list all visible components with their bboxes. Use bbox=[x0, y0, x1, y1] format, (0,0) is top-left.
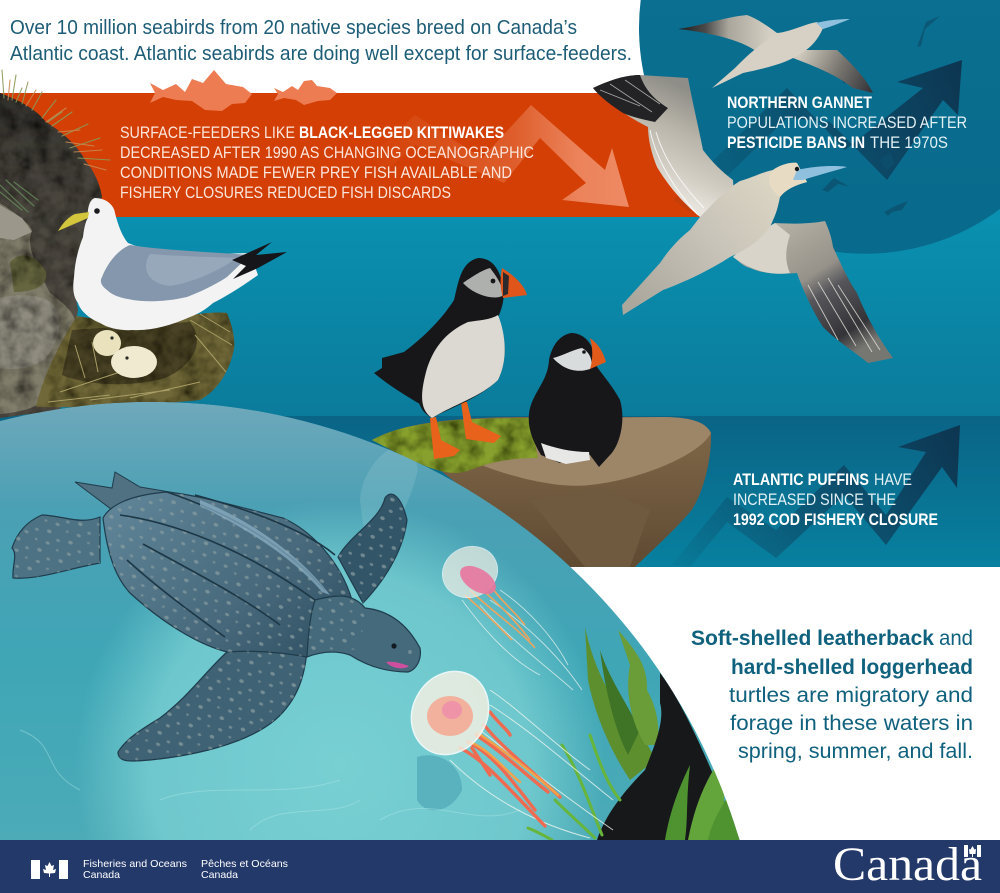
department name French bbox=[201, 858, 288, 881]
panel: sea background bbox=[0, 150, 1000, 418]
arrow: puffin increase bbox=[672, 425, 960, 567]
illustration: small northern gannet bbox=[678, 15, 873, 93]
text block: atlantic puffins: 1992 COD FISHERY CLOSURE bbox=[733, 510, 938, 529]
text block: northern gannet: THE 1970S bbox=[870, 133, 948, 152]
illustration: puffin standing bbox=[374, 258, 527, 459]
department name French: Pêches et Océans bbox=[201, 858, 288, 870]
panel: orange surface-feeder band bbox=[0, 70, 700, 217]
text block: surface-feeders bbox=[120, 123, 534, 202]
text block: northern gannet: PESTICIDE BANS IN bbox=[727, 133, 865, 152]
illustration: seaweed bbox=[528, 627, 745, 840]
heading: intro text: Atlantic coast. Atlantic seabirds are doing well except for surface-feeders. bbox=[10, 42, 632, 65]
text block: atlantic puffins bbox=[733, 470, 938, 529]
illustration: puffin from behind bbox=[529, 333, 622, 467]
grass tuft bbox=[2, 70, 110, 170]
arrow: kittiwake decrease bbox=[370, 105, 629, 207]
text block: atlantic puffins: ATLANTIC PUFFINS bbox=[733, 470, 869, 489]
mouth bbox=[386, 662, 409, 668]
text block: sea turtles: and bbox=[939, 627, 973, 650]
heading: intro text bbox=[10, 16, 632, 65]
footer bbox=[0, 838, 1000, 893]
tail points bbox=[75, 472, 170, 512]
lower wing bbox=[733, 221, 893, 363]
text block: surface-feeders: SURFACE-FEEDERS LIKE bbox=[120, 123, 295, 142]
rear flipper bbox=[12, 515, 100, 578]
dark rock face bbox=[0, 93, 102, 418]
department name English bbox=[83, 858, 187, 881]
icon: Canadian flag signature bbox=[31, 860, 68, 879]
lower grey boulder bbox=[0, 203, 75, 414]
illustration: upper jellyfish bbox=[434, 538, 582, 690]
text block: surface-feeders: FISHERY CLOSURES REDUCED FISH DISCARDS bbox=[120, 183, 451, 202]
illustration: large northern gannet bbox=[593, 75, 893, 363]
arrow: gannet increase bbox=[673, 60, 962, 212]
text block: sea turtles bbox=[691, 627, 973, 763]
text block: northern gannet: NORTHERN GANNET bbox=[727, 93, 873, 112]
legs and feet bbox=[430, 402, 501, 459]
illustration: black-legged kittiwake bbox=[58, 198, 287, 330]
department name English: Fisheries and Oceans bbox=[83, 858, 187, 870]
text block: surface-feeders: CONDITIONS MADE FEWER PREY FISH AVAILABLE AND bbox=[120, 163, 512, 182]
icon: chick 2 bbox=[111, 346, 157, 378]
icon: distant gannet silhouettes bbox=[822, 16, 940, 216]
department name French: Canada bbox=[201, 869, 238, 881]
text block: sea turtles: spring, summer, and fall. bbox=[738, 740, 973, 763]
text block: sea turtles: turtles are migratory and bbox=[729, 684, 973, 707]
beak bbox=[501, 268, 527, 298]
shell ridges bbox=[120, 492, 335, 637]
text block: surface-feeders: BLACK-LEGGED KITTIWAKES bbox=[299, 123, 504, 142]
upper wing bbox=[593, 75, 735, 217]
text block: sea turtles: Soft-shelled leatherback bbox=[691, 627, 934, 650]
illustration: puffin ledge bbox=[372, 417, 711, 567]
neck and head bbox=[307, 596, 420, 672]
icon: small fish bbox=[274, 80, 337, 105]
panel: darker sea band behind puffin text bbox=[0, 416, 1000, 567]
beak bbox=[793, 166, 847, 180]
dark rock bbox=[597, 673, 740, 840]
text block: atlantic puffins: INCREASED SINCE THE bbox=[733, 490, 896, 509]
shell bbox=[103, 492, 352, 657]
icon: chick 1 bbox=[93, 330, 121, 356]
text block: northern gannet bbox=[727, 93, 967, 152]
text block: sea turtles: forage in these waters in bbox=[730, 712, 973, 735]
top flipper bbox=[338, 494, 407, 603]
lower flipper bbox=[118, 645, 307, 761]
text block: sea turtles: hard-shelled loggerhead bbox=[731, 656, 973, 679]
illustration: nest with chicks bbox=[36, 312, 234, 407]
illustration: lower jellyfish bbox=[410, 670, 614, 838]
illustration: cliff with grass bbox=[0, 70, 110, 418]
panel: gannet circle bbox=[639, 0, 1000, 254]
icon: large fish bbox=[150, 70, 252, 111]
panel: underwater sphere bbox=[0, 402, 745, 840]
department name English: Canada bbox=[83, 869, 120, 881]
illustration: leatherback turtle bbox=[12, 472, 420, 761]
grass patch bbox=[372, 418, 538, 473]
body bbox=[622, 163, 807, 315]
heading: intro text: Over 10 million seabirds from 20 native species breed on Canada’s bbox=[10, 16, 577, 39]
text block: surface-feeders: DECREASED AFTER 1990 AS CHANGING OCEANOGRAPHIC bbox=[120, 143, 534, 162]
underwater coastline map bbox=[20, 450, 590, 840]
text block: atlantic puffins: HAVE bbox=[874, 470, 912, 489]
Canada wordmark: Canada bbox=[833, 838, 982, 891]
